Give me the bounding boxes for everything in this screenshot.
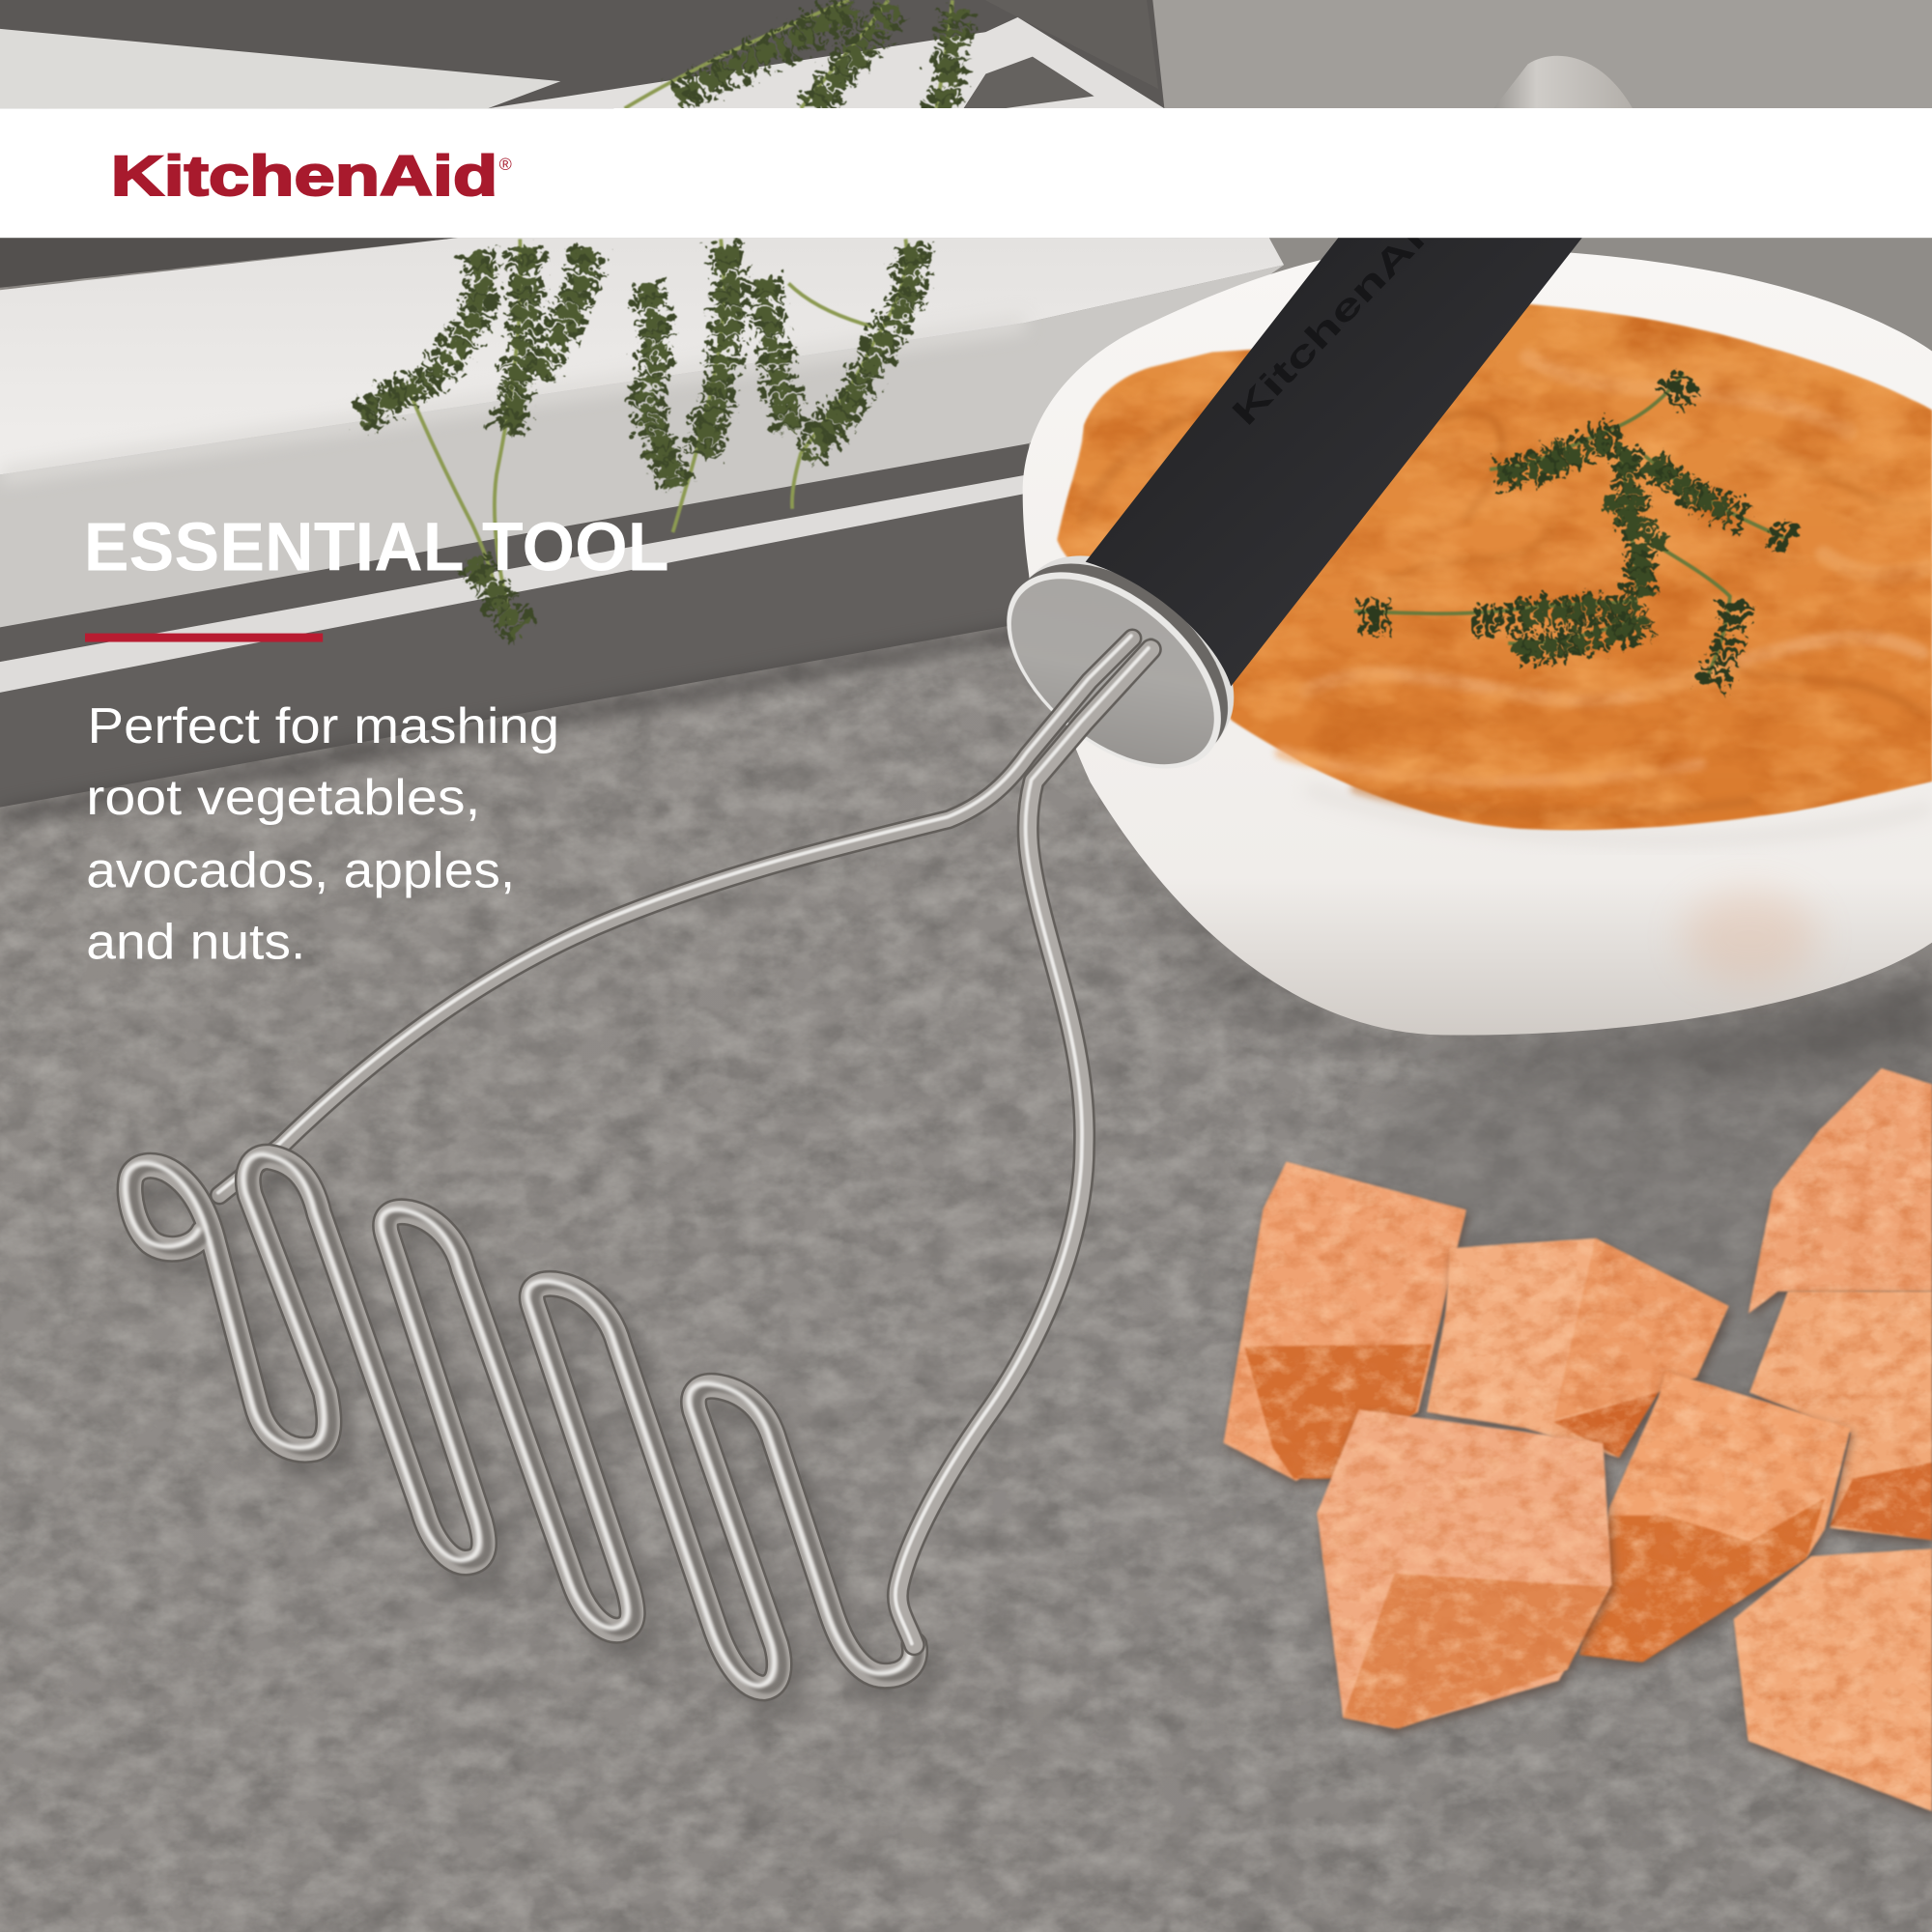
handle embossed wordmark: KitchenAid xyxy=(1224,194,1456,433)
cube, bottom right xyxy=(1734,1548,1932,1811)
masher disc xyxy=(971,517,1271,807)
white bowl xyxy=(1023,248,1932,1036)
thyme on towel xyxy=(355,0,952,625)
sweet potato cubes xyxy=(1224,1068,1932,1811)
body copy xyxy=(86,698,559,970)
body copy: Perfect for mashing xyxy=(88,698,559,754)
white header band xyxy=(0,108,1932,238)
masher handle xyxy=(1086,56,1633,686)
bowl shadow xyxy=(1084,788,1932,1071)
cube, centre right xyxy=(1579,1372,1851,1662)
heading: ESSENTIAL TOOL xyxy=(84,509,669,586)
body copy: root vegetables, xyxy=(86,770,480,826)
cube, right middle xyxy=(1749,1292,1932,1540)
wire arm, rear xyxy=(218,636,1132,1195)
brand logo: ® xyxy=(499,155,512,174)
cube, front centre xyxy=(1318,1409,1611,1729)
red divider xyxy=(85,634,323,642)
body copy: avocados, apples, xyxy=(86,842,515,898)
mashed sweet potato xyxy=(1057,303,1932,830)
thyme garnish xyxy=(1354,373,1785,681)
masher wire grid xyxy=(125,648,1151,1708)
cube, left xyxy=(1224,1162,1466,1481)
body copy: and nuts. xyxy=(86,914,305,970)
cube, middle back xyxy=(1427,1238,1729,1458)
folded towel xyxy=(0,0,1284,828)
brand logo: KitchenAid xyxy=(111,145,497,208)
cube, upper right xyxy=(1748,1068,1932,1314)
